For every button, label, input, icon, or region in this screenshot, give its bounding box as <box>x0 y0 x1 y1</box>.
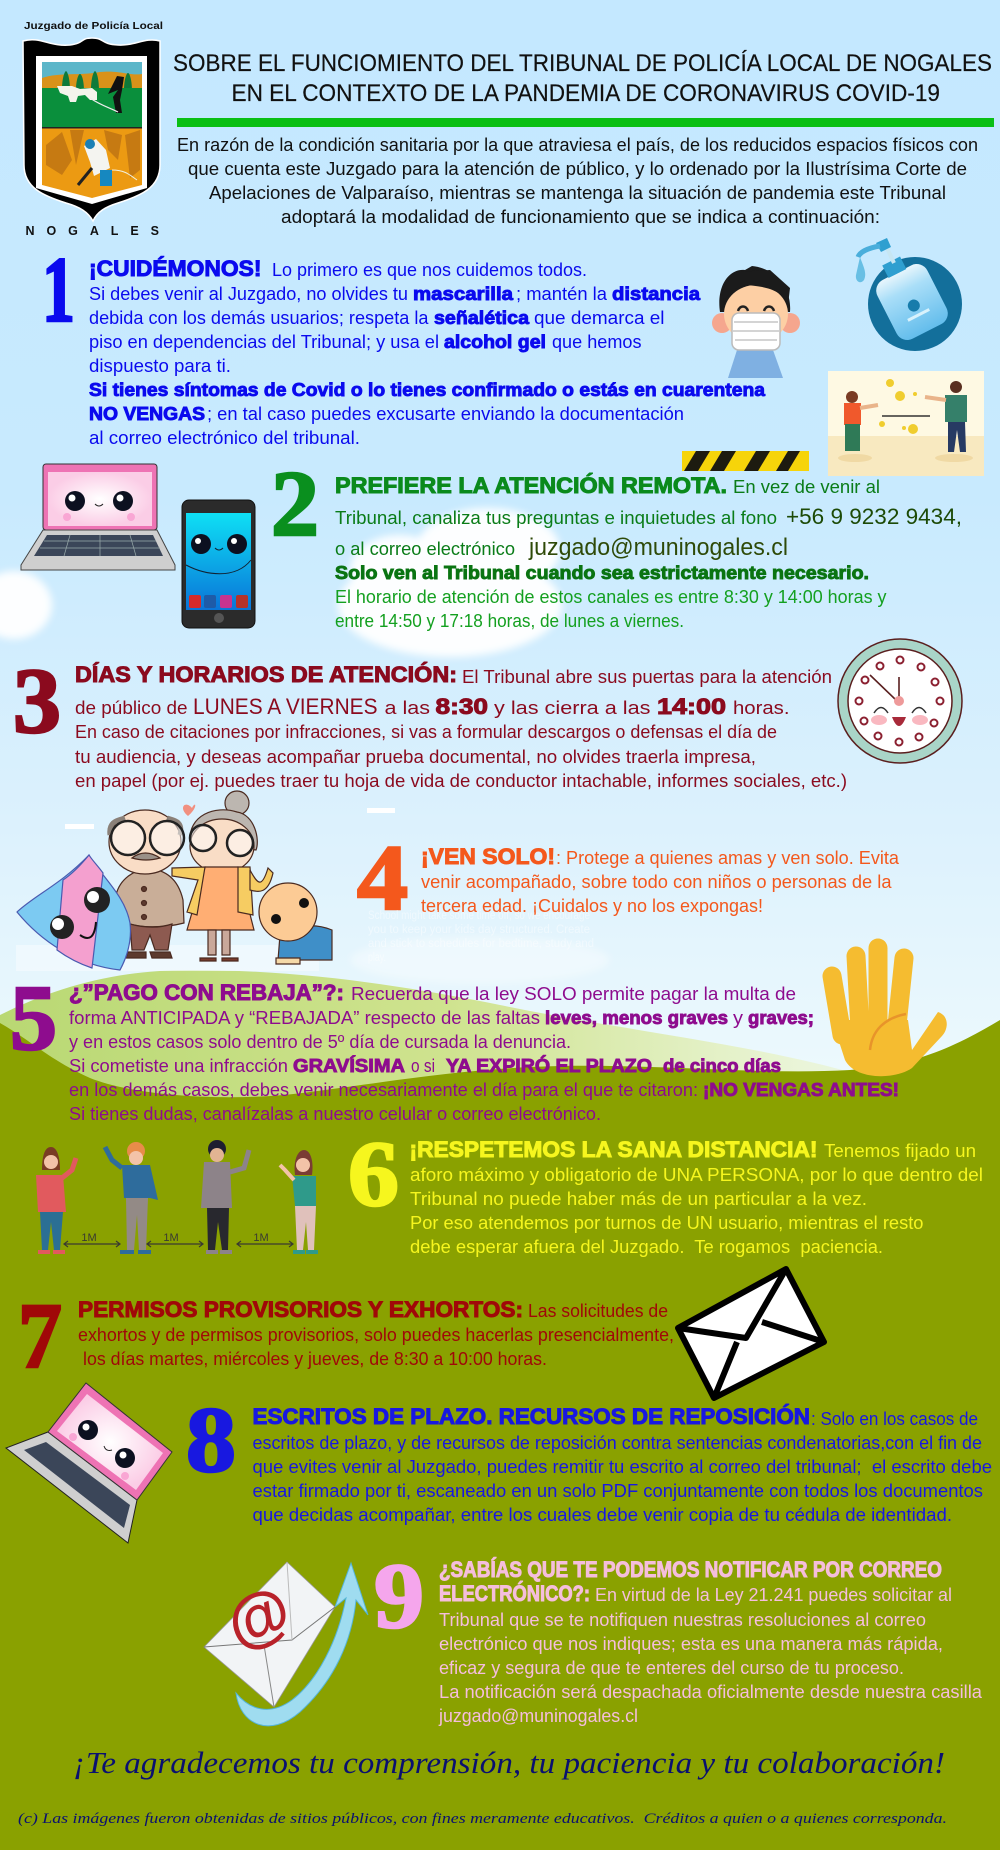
text block 8: : Solo en los casos de <box>811 1408 978 1429</box>
text block 3: y las cierra a las <box>494 697 650 718</box>
grandmother <box>172 791 273 961</box>
intro text: que cuenta este Juzgado para la atención de público, y lo ordenado por la Ilustrísima Corte de <box>188 158 967 179</box>
text block 5: Si tienes dudas, canalízalas a nuestro celular o correo electrónico. <box>69 1103 601 1124</box>
intro text: En razón de la condición sanitaria por la que atraviesa el país, de los reducidos espacios físicos con <box>177 134 978 155</box>
number 4: 4 <box>357 827 408 930</box>
text block 1: alcohol gel <box>444 331 546 352</box>
text block 5: y en estos casos solo dentro de 5º día de cursada la denuncia. <box>69 1031 571 1052</box>
illustration: four people one metre apart <box>36 1140 318 1254</box>
title <box>173 50 992 107</box>
text block 6: Tribunal no puede haber más de un particular a la vez. <box>410 1188 867 1209</box>
text block 7 <box>78 1300 674 1369</box>
text block 1: que demarca el <box>534 307 664 328</box>
icon: smiling clock <box>838 639 962 763</box>
icon: kawaii phone <box>182 500 255 628</box>
text block 9: En virtud de la Ley 21.241 puedes solicitar al <box>595 1584 952 1605</box>
text block 1: ; en tal caso puedes excusarte enviando la documentación <box>207 403 684 424</box>
text block 1: piso en dependencias del Tribunal; y usa el <box>89 331 439 352</box>
number 9: 9 <box>374 1545 424 1648</box>
text block 5: de cinco días <box>663 1055 781 1076</box>
text block 2: En vez de venir al <box>733 476 880 497</box>
faint residual text: and stick to schedules for bedtime, study and <box>368 938 594 950</box>
text block 8: que decidas acompañar, entre los cuales debe venir copia de tu cédula de identidad. <box>252 1504 952 1525</box>
text block 5: Si cometiste una infracción <box>69 1055 288 1076</box>
number 6: 6 <box>348 1123 399 1226</box>
text block 8: escritos de plazo, y de recursos de reposición contra sentencias condenatorias,con el fin de <box>252 1432 982 1453</box>
number 5: 5 <box>10 967 57 1070</box>
shield character <box>17 855 131 970</box>
heading 7: PERMISOS PROVISORIOS Y EXHORTOS: <box>78 1297 523 1322</box>
text block 1 <box>89 259 766 448</box>
faint residual text: you to keep your kids day structured. Create <box>368 924 590 936</box>
text block 8 <box>252 1408 992 1525</box>
heading 9: ELECTRÓNICO?: <box>439 1581 590 1606</box>
text block 1: mascarilla <box>413 283 514 304</box>
text block 2 <box>335 476 962 631</box>
closing message: ¡Te agradecemos tu comprensión, tu paciencia y tu colaboración! <box>73 1745 945 1780</box>
icon: black and white envelope <box>678 1269 824 1398</box>
text block 3: 14:00 <box>657 694 726 719</box>
icon: tilted pink laptop <box>6 1383 172 1543</box>
footer credits: (c) Las imágenes fueron obtenidas de sitios públicos, con fines meramente educativos. Créditos a quien o a quienes corresponda. <box>18 1811 947 1827</box>
text block 6: debe esperar afuera del Juzgado. Te rogamos paciencia. <box>410 1236 883 1257</box>
text block 3: tu audiencia, y deseas acompañar prueba documental, no olvides traerla impresa, <box>75 746 756 767</box>
text block 5: forma ANTICIPADA y “REBAJADA” respecto de las faltas <box>69 1007 540 1028</box>
faint residual text <box>368 910 594 964</box>
icon: boy with mask <box>712 266 800 378</box>
text block 1: debida con los demás usuarios; respeta la <box>89 307 429 328</box>
icon: social distancing picture <box>828 371 984 476</box>
panel: section 6 sana distancia <box>348 1123 983 1257</box>
text block 4: : Protege a quienes amas y ven solo. Evita <box>556 847 900 868</box>
number 8: 8 <box>186 1389 236 1492</box>
intro text <box>177 134 978 227</box>
icon: alcohol gel bottle <box>856 238 962 351</box>
panel: section 3 días y horarios <box>13 650 847 791</box>
text block 2: El horario de atención de estos canales es entre 8:30 y 14:00 horas y <box>335 586 887 607</box>
heading 8: ESCRITOS DE PLAZO. RECURSOS DE REPOSICIÓN <box>252 1404 810 1429</box>
text block 7: Las solicitudes de <box>528 1300 668 1321</box>
logo: Nogales coat of arms <box>23 21 163 238</box>
text block 7: exhortos y de permisos provisorios, solo puedes hacerlas presencialmente, <box>78 1324 674 1345</box>
icon: email envelope with arrow <box>204 1562 368 1726</box>
text block 6: Por eso atendemos por turnos de UN usuario, mientras el resto <box>410 1212 924 1233</box>
text block 5 <box>69 983 899 1124</box>
text block 4: venir acompañado, sobre todo con niños o personas de la <box>421 871 892 892</box>
illustration: four people one metre apart: 1M <box>163 1232 179 1244</box>
text block 1: distancia <box>612 283 701 304</box>
text block 3: horas. <box>733 697 790 718</box>
panel: section 5 pago con rebaja <box>10 967 899 1124</box>
text block 3 <box>75 666 847 791</box>
text block 4: tercera edad. ¡Cuidalos y no los expongas! <box>421 895 763 916</box>
text block 3: en papel (por ej. puedes traer tu hoja de vida de conductor intachable, informes sociales, etc.) <box>75 770 847 791</box>
number 3: 3 <box>13 650 61 753</box>
text block 7: los días martes, miércoles y jueves, de 8:30 a 10:00 horas. <box>83 1348 547 1369</box>
heading 1: ¡CUIDÉMONOS! <box>89 256 262 281</box>
baby <box>259 883 332 964</box>
text block 2: entre 14:50 y 17:18 horas, de lunes a viernes. <box>335 610 684 631</box>
faint residual text: School might take some time off, so we encourage <box>368 910 590 922</box>
text block 4 <box>421 847 900 916</box>
icon: email envelope with arrow: @ <box>216 1572 301 1662</box>
text block 9: electrónico que nos indiques; esta es una manera más rápida, <box>439 1633 943 1654</box>
intro text: adoptará la modalidad de funcionamiento que se indica a continuación: <box>281 206 880 227</box>
text block 1: señalética <box>434 307 530 328</box>
icon: hazard tape <box>682 451 809 471</box>
text block 5: GRAVÍSIMA <box>293 1055 405 1076</box>
text block 5: y <box>733 1007 744 1028</box>
text block 5: en los demás casos, debes venir necesariamente el día para el que te citaron: <box>69 1079 698 1100</box>
logo: Nogales coat of arms: Juzgado de Policía Local <box>24 21 163 32</box>
text block 3: 8:30 <box>436 694 488 719</box>
text block 2: Solo ven al Tribunal cuando sea estrictamente necesario. <box>335 562 869 583</box>
number 2: 2 <box>271 453 319 556</box>
text block 1: al correo electrónico del tribunal. <box>89 427 360 448</box>
text block 2: Tribunal, canaliza tus preguntas e inquietudes al fono <box>335 507 777 528</box>
intro text: Apelaciones de Valparaíso, mientras se mantenga la situación de pandemia este Tribunal <box>209 182 946 203</box>
text block 5: Recuerda que la ley SOLO permite pagar la multa de <box>351 983 796 1004</box>
logo: Nogales coat of arms: NOGALES <box>26 224 159 238</box>
panel: section 1 cuidémonos <box>42 239 766 448</box>
text block 1: que hemos <box>552 331 642 352</box>
grandfather <box>109 810 184 958</box>
phone number: +56 9 9232 9434, <box>786 504 962 529</box>
heading 6: ¡RESPETEMOS LA SANA DISTANCIA! <box>410 1137 818 1162</box>
heading 2: PREFIERE LA ATENCIÓN REMOTA. <box>335 473 727 498</box>
text block 3: En caso de citaciones por infracciones, si vas a formular descargos o defensas el día de <box>75 721 777 742</box>
text block 3: a las <box>384 697 430 718</box>
number 1: 1 <box>42 239 75 342</box>
illustration: grandparents, baby and shield <box>16 791 395 971</box>
text block 9: La notificación será despachada oficialmente desde nuestra casilla <box>439 1681 983 1702</box>
text block 9 <box>438 1584 983 1726</box>
panel: section 7 permisos <box>18 1285 674 1388</box>
title: EN EL CONTEXTO DE LA PANDEMIA DE CORONAVIRUS COVID-19 <box>232 80 940 107</box>
faint residual text: play. <box>368 952 386 964</box>
icon: yellow stop hand <box>832 948 947 1076</box>
text block 9: juzgado@muninogales.cl <box>438 1705 638 1726</box>
heading 3: DÍAS Y HORARIOS DE ATENCIÓN: <box>75 662 457 687</box>
text block 1: Lo primero es que nos cuidemos todos. <box>272 259 587 280</box>
illustration: four people one metre apart: 1M <box>253 1232 269 1244</box>
number 7: 7 <box>18 1285 62 1388</box>
heading 9 <box>439 1557 942 1606</box>
email address: juzgado@muninogales.cl <box>528 534 788 561</box>
text block 8: que evites venir al Juzgado, puedes remitir tu escrito al correo del tribunal; el escrito debe <box>252 1456 992 1477</box>
text block 3: El Tribunal abre sus puertas para la atención <box>462 666 832 687</box>
text block 1: ; mantén la <box>516 283 608 304</box>
text block 3: de público de <box>75 697 188 718</box>
text block 6: aforo máximo y obligatorio de UNA PERSONA, por lo que dentro del <box>410 1164 983 1185</box>
text block 5: leves, menos graves <box>545 1007 728 1028</box>
icon: pink laptop <box>21 464 175 570</box>
text block 8: estar firmado por ti, escaneado en un solo PDF conjuntamente con todos los documentos <box>252 1480 983 1501</box>
text block 9: Tribunal que se te notifiquen nuestras resoluciones al correo <box>439 1609 926 1630</box>
text block 1: dispuesto para ti. <box>89 355 231 376</box>
text block 6 <box>410 1140 983 1257</box>
text block 1: Si debes venir al Juzgado, no olvides tu <box>89 283 408 304</box>
panel: section 8 escritos de plazo <box>186 1389 992 1525</box>
text block 5: ¡NO VENGAS ANTES! <box>703 1079 899 1100</box>
text block 5: YA EXPIRÓ EL PLAZO <box>446 1055 652 1076</box>
text block 1: Si tienes síntomas de Covid o lo tienes confirmado o estás en cuarentena <box>89 379 766 400</box>
heading 4: ¡VEN SOLO! <box>421 844 555 869</box>
text block 6: Tenemos fijado un <box>824 1140 976 1161</box>
heading 5: ¿”PAGO CON REBAJA”?: <box>69 980 344 1005</box>
text block 1: NO VENGAS <box>89 403 205 424</box>
panel: section 4 ven solo <box>357 827 900 930</box>
text block 5: o si <box>411 1055 435 1076</box>
text block 5: graves; <box>748 1007 814 1028</box>
illustration: four people one metre apart: 1M <box>81 1232 97 1244</box>
text block 2: o al correo electrónico <box>335 538 515 559</box>
panel: section 2 atención remota <box>271 453 962 631</box>
panel: section 9 notificación electrónica <box>374 1545 983 1726</box>
text block 9: eficaz y segura de que te enteres del curso de tu proceso. <box>439 1657 904 1678</box>
text block 3: LUNES A VIERNES <box>193 694 378 719</box>
